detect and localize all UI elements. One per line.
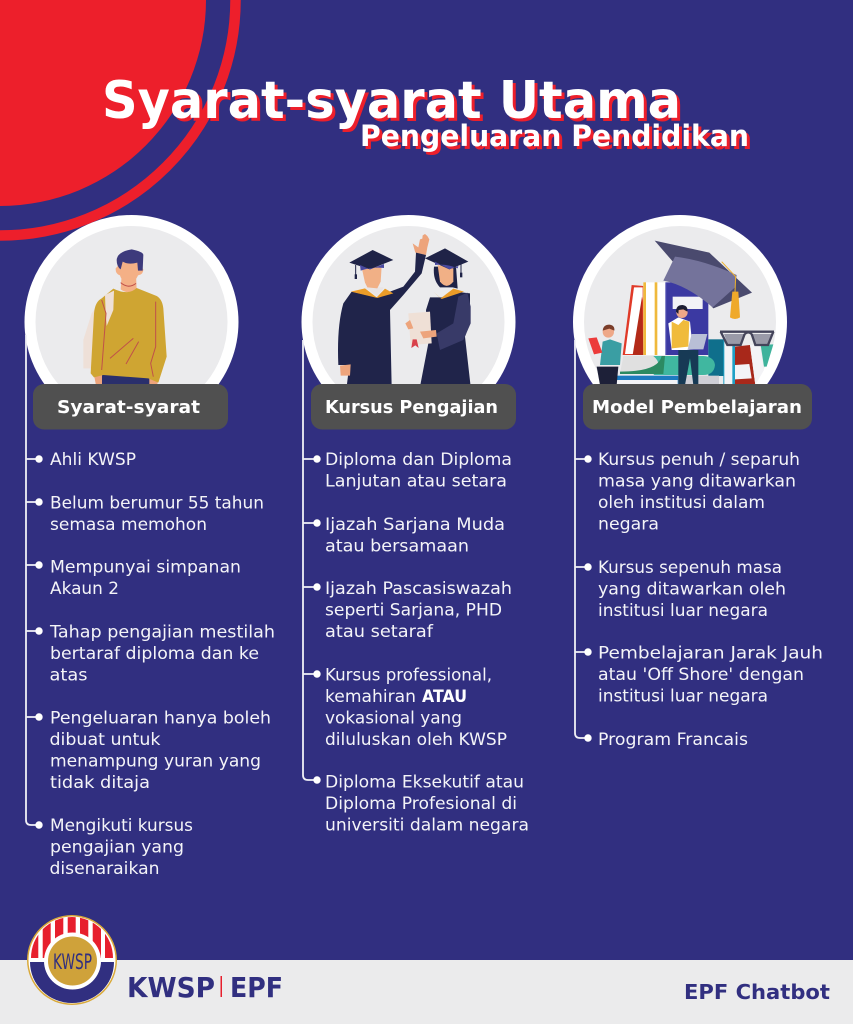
label: kursus pengajian xyxy=(311,384,516,430)
list: syarat-syarat: tidak ditaja xyxy=(50,773,150,792)
list: kursus pengajian: atau setaraf xyxy=(325,622,434,641)
list: syarat-syarat: Mempunyai simpanan xyxy=(50,558,241,576)
panel: syarat-syarat xyxy=(26,220,275,878)
list: model pembelajaran: institusi luar negara xyxy=(598,601,768,620)
logo wordmark: KWSP xyxy=(127,971,215,1004)
list: syarat-syarat: Ahli KWSP xyxy=(50,450,136,469)
list: syarat-syarat xyxy=(49,450,275,878)
list: kursus pengajian: Ijazah Sarjana Muda xyxy=(325,515,505,534)
list: model pembelajaran: yang ditawarkan oleh xyxy=(598,580,786,598)
label: model pembelajaran: Model Pembelajaran xyxy=(592,397,802,418)
title: Syarat-syarat Utama xyxy=(102,71,681,131)
list: kursus pengajian: Kursus professional, xyxy=(325,666,492,684)
red corner decoration xyxy=(0,0,236,236)
list: model pembelajaran xyxy=(598,450,823,749)
panel: model pembelajaran xyxy=(575,220,823,749)
label: kursus pengajian: Kursus Pengajian xyxy=(325,397,498,418)
label: syarat-syarat xyxy=(33,384,228,430)
list: syarat-syarat: atas xyxy=(50,666,88,684)
title xyxy=(102,71,749,153)
list: model pembelajaran: masa yang ditawarkan xyxy=(598,472,796,490)
logo: KWSP emblem: KWSP xyxy=(53,950,92,975)
list: kursus pengajian: Lanjutan atau setara xyxy=(325,472,507,490)
logo: KWSP emblem xyxy=(27,915,117,1005)
list: kursus pengajian: vokasional yang xyxy=(325,708,462,728)
list: kursus pengajian: Ijazah Pascasiswazah xyxy=(325,579,512,598)
icon: student in yellow sweater xyxy=(30,220,233,424)
list: kursus pengajian: diluluskan oleh KWSP xyxy=(325,730,507,749)
list: syarat-syarat: bertaraf diploma dan ke xyxy=(50,644,259,663)
list: syarat-syarat: Belum berumur 55 tahun xyxy=(50,494,264,512)
list: kursus pengajian: ATAU xyxy=(422,687,467,706)
list: model pembelajaran: oleh institusi dalam xyxy=(598,493,765,512)
list: syarat-syarat: Tahap pengajian mestilah xyxy=(49,622,275,642)
list: model pembelajaran: Program Francais xyxy=(598,730,748,749)
list: syarat-syarat: menampung yuran yang xyxy=(50,752,261,770)
list: syarat-syarat: pengajian yang xyxy=(50,838,184,856)
list: syarat-syarat: Mengikuti kursus xyxy=(50,816,193,835)
list: syarat-syarat: Pengeluaran hanya boleh xyxy=(50,708,271,728)
icon: graduates xyxy=(307,220,510,424)
list: model pembelajaran: Kursus sepenuh masa xyxy=(598,558,782,577)
icon: books, mortarboard and students xyxy=(578,220,782,424)
list: syarat-syarat: dibuat untuk xyxy=(50,730,161,749)
connector with bullets xyxy=(303,340,321,784)
list: kursus pengajian: atau bersamaan xyxy=(325,536,469,556)
list: kursus pengajian: Diploma dan Diploma xyxy=(325,450,512,469)
logo wordmark xyxy=(127,971,283,1004)
panel: kursus pengajian xyxy=(303,220,529,834)
list: kursus pengajian: universiti dalam negara xyxy=(325,816,529,834)
list: kursus pengajian: Diploma Eksekutif atau xyxy=(325,772,524,792)
list: kursus pengajian: Diploma Profesional di xyxy=(325,794,517,813)
logo wordmark: EPF xyxy=(230,971,283,1004)
list: model pembelajaran: institusi luar negara xyxy=(598,686,768,706)
list: syarat-syarat: Akaun 2 xyxy=(50,579,119,598)
list: kursus pengajian: kemahiran xyxy=(325,687,416,706)
list: kursus pengajian: seperti Sarjana, PHD xyxy=(325,600,502,620)
list: model pembelajaran: Pembelajaran Jarak Jauh xyxy=(598,644,823,662)
footer text: EPF Chatbot xyxy=(684,980,830,1004)
connector with bullets xyxy=(26,335,43,829)
list: syarat-syarat: disenaraikan xyxy=(50,859,160,878)
list: model pembelajaran: negara xyxy=(598,514,659,534)
connector with bullets xyxy=(575,340,592,742)
list: model pembelajaran: atau 'Off Shore' dengan xyxy=(598,665,804,684)
list: syarat-syarat: semasa memohon xyxy=(50,515,207,534)
label: syarat-syarat: Syarat-syarat xyxy=(57,397,200,418)
title: Pengeluaran Pendidikan xyxy=(360,119,749,153)
list: model pembelajaran: Kursus penuh / separuh xyxy=(598,450,800,469)
list: kursus pengajian xyxy=(325,450,529,834)
label: model pembelajaran xyxy=(583,384,812,430)
footer band xyxy=(0,960,853,1024)
